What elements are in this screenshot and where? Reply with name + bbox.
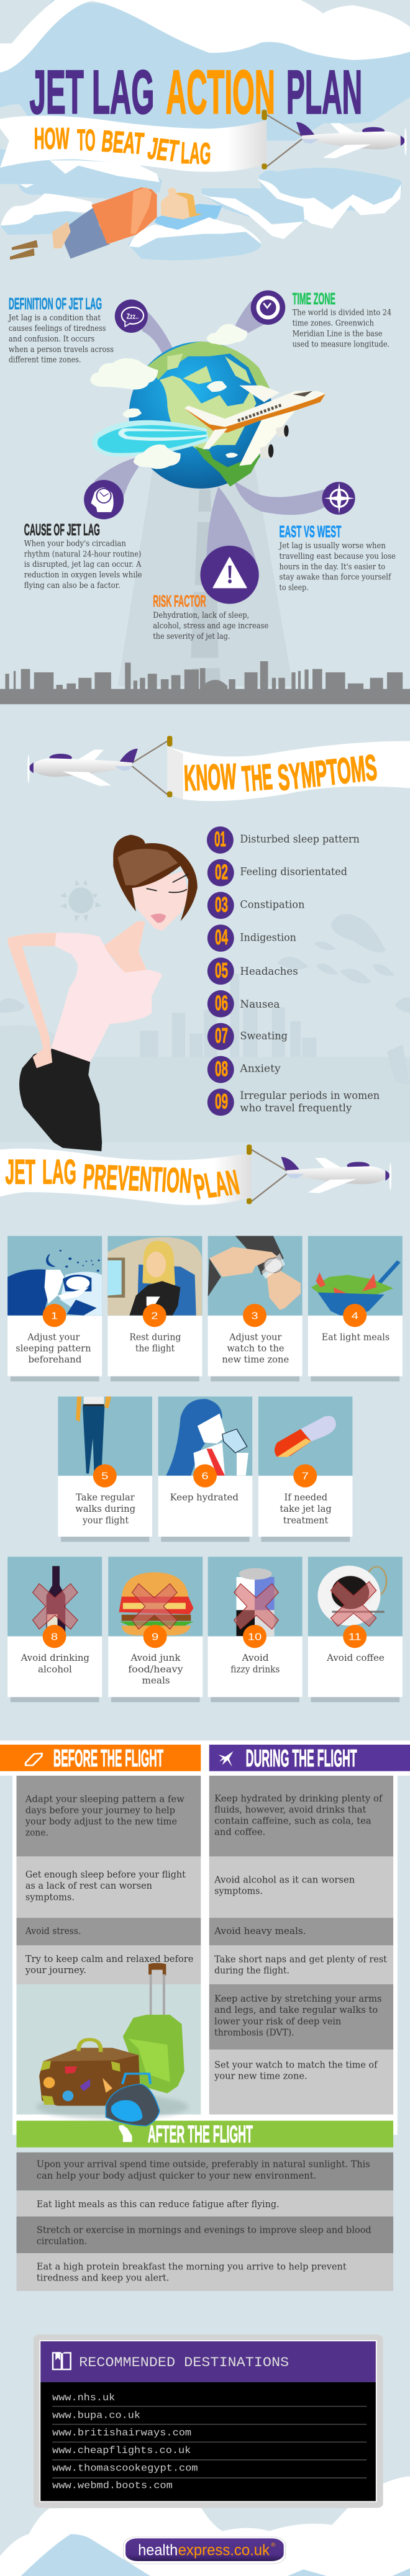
symptom list: 02: [215, 860, 228, 884]
plane towing prevention banner: [247, 1144, 391, 1204]
card 2: [107, 1236, 202, 1381]
card 6: [158, 1396, 252, 1542]
icon: clock: [251, 291, 285, 325]
icon: compass: [322, 482, 355, 515]
card 4: 4: [352, 1310, 358, 1321]
light beams: [117, 468, 293, 686]
illustration: wine bottle: [33, 1566, 78, 1636]
illustration: walking man: [76, 1396, 111, 1473]
text: time zone: The world is divided into 24: [293, 308, 391, 318]
card 8: Avoid drinking: [20, 1653, 89, 1663]
card 7: treatment: [283, 1515, 328, 1526]
card 1: Adjust your: [27, 1332, 80, 1343]
during column: your new time zone.: [214, 2071, 308, 2082]
card 10: Avoid: [241, 1653, 269, 1663]
icon: speech bubble: Zzz..: [127, 313, 139, 321]
card 10: [208, 1557, 303, 1702]
badge 8: [43, 1625, 66, 1648]
after rows: can help your body adjust quicker to your new environment.: [37, 2171, 316, 2181]
card 1: sleeping pattern: [16, 1343, 91, 1354]
section: before and during the flight: BEFORE THE FLIGHT: [53, 1745, 163, 1772]
section: symptoms: [0, 736, 410, 1151]
symptom list: 09: [215, 1090, 228, 1113]
globe: [129, 341, 273, 489]
card 11: [308, 1557, 403, 1702]
symptom list: 08: [215, 1057, 228, 1080]
text: east vs west: travelling east because you lose: [280, 552, 396, 561]
url list: www.cheapflights.co.uk: [52, 2446, 191, 2456]
card 4: Eat light meals: [322, 1332, 390, 1343]
header: before the flight: [0, 1745, 201, 1772]
symptom list: Headaches: [240, 965, 298, 977]
card 9: food/heavy: [128, 1664, 183, 1675]
logo badge: health: [138, 2541, 178, 2559]
card 1: beforehand: [28, 1354, 81, 1365]
card 3: 3: [251, 1310, 258, 1321]
woman: [8, 834, 198, 1151]
badge 3: [243, 1304, 266, 1327]
section: prevention plan: [0, 1144, 403, 1542]
section: what is jet lag: [0, 290, 410, 704]
during column: during the flight.: [214, 1965, 289, 1976]
url list: [52, 2393, 198, 2492]
text: risk factor: [153, 592, 269, 641]
card 2: 2: [151, 1310, 158, 1321]
text: east vs west: hours in the day. It's easier to: [280, 562, 385, 572]
text: risk factor: alcohol, stress and age increase: [153, 621, 269, 631]
sleeping man: [10, 188, 222, 260]
card 7: 7: [302, 1471, 309, 1481]
header: after the flight: [17, 2121, 393, 2148]
badge 6: [193, 1464, 217, 1488]
card 1: [7, 1236, 102, 1381]
symptom list: Anxiety: [239, 1062, 281, 1075]
card 5: walks during: [75, 1504, 135, 1514]
plane towing symptoms banner: [27, 736, 172, 797]
symptom list: Disturbed sleep pattern: [240, 833, 360, 845]
before column: Get enough sleep before your flight: [25, 1869, 186, 1880]
text: time zone: TIME ZONE: [293, 290, 335, 308]
card 9: 9: [152, 1631, 158, 1642]
card 11: Avoid coffee: [326, 1653, 385, 1663]
after rows: tiredness and keep you alert.: [37, 2272, 169, 2284]
before column: Adapt your sleeping pattern a few: [25, 1794, 184, 1805]
badge 4: [343, 1304, 367, 1327]
card 6: Keep hydrated: [170, 1492, 239, 1503]
text: time zone: used to measure longitude.: [293, 340, 390, 349]
lower left clouds: [0, 149, 162, 199]
badge 1: [43, 1304, 66, 1327]
blue cloud peaks: [21, 2534, 410, 2576]
badge 2: [143, 1304, 166, 1327]
section: prevention plan: PLAN: [191, 1164, 242, 1206]
during column: and coffee.: [214, 1827, 265, 1838]
before column: [17, 1776, 201, 2115]
logo badge: ®: [271, 2542, 276, 2547]
logo badge: [124, 2537, 286, 2564]
text: east vs west: Jet lag is usually worse when: [278, 541, 386, 551]
white panel: [0, 1740, 410, 2135]
text: definition: and confusion. It occurs: [9, 335, 94, 344]
card 9: meals: [142, 1675, 170, 1686]
runway marks: [191, 489, 221, 689]
clouds: [90, 324, 247, 469]
banner: prevention: [0, 1149, 252, 1206]
faint sun: [60, 880, 102, 922]
section: before and during the flight: [0, 1740, 410, 2135]
before column: as a lack of rest can worsen: [25, 1881, 152, 1891]
symptom list: 07: [215, 1024, 228, 1047]
text: definition: different time zones.: [9, 355, 81, 365]
banner: how to beat jet lag: LAG: [180, 136, 212, 171]
during column: symptoms.: [214, 1886, 263, 1897]
symptom list: 04: [215, 925, 228, 949]
faint city background: [0, 914, 410, 1142]
card 3: watch to the: [227, 1343, 285, 1354]
text: cause: rhythm (natural 24-hour routine): [24, 549, 141, 559]
before column: zone.: [25, 1827, 48, 1838]
card 2: Rest during: [129, 1332, 181, 1343]
text: risk factor: RISK FACTOR: [153, 592, 206, 610]
bottom clouds: [0, 2476, 410, 2576]
url list: www.bupa.co.uk: [52, 2410, 140, 2421]
icon: speech bubble: [115, 299, 148, 333]
destinations panel: [34, 2334, 383, 2508]
card 3: new time zone: [222, 1354, 289, 1365]
card 8: alcohol: [38, 1664, 72, 1675]
text: time zone: Meridian Line is the base: [293, 329, 383, 338]
connector cones: [94, 301, 324, 561]
card 9: [108, 1557, 203, 1702]
card 11: 11: [348, 1631, 362, 1642]
card 6: 6: [201, 1471, 209, 1481]
card 2: the flight: [135, 1343, 175, 1354]
card 8: [7, 1557, 102, 1702]
text: time zone: time zones. Greenwich: [293, 319, 374, 328]
logo badge: express.co.uk: [178, 2541, 270, 2559]
after rows: circulation.: [37, 2236, 87, 2247]
right clouds: [201, 168, 402, 224]
illustration: drinks can: [234, 1568, 278, 1636]
banner: how to beat jet lag: [0, 115, 266, 172]
symptom list: who travel frequently: [240, 1102, 352, 1114]
text: risk factor: the severity of jet lag.: [153, 632, 230, 641]
card 5: your flight: [82, 1515, 129, 1526]
symptom list: Irregular periods in women: [240, 1089, 380, 1101]
text: time zone: [293, 290, 391, 349]
illustration: woman drinking water: [166, 1399, 248, 1476]
symptom list: 06: [215, 991, 228, 1015]
section: header sky: [0, 0, 410, 260]
text: east vs west: [278, 523, 396, 593]
symptom list: Feeling disorientated: [240, 865, 347, 878]
symptom list: [207, 826, 380, 1116]
symptom list: Indigestion: [240, 931, 296, 944]
text: east vs west: EAST VS WEST: [280, 523, 342, 541]
card 8: 8: [51, 1631, 58, 1642]
section: recommended destinations: [0, 2334, 410, 2576]
illustration: coffee cup: [317, 1566, 386, 1626]
illustration: woman in plane seat: [107, 1237, 202, 1316]
illustration: capsule: [275, 1416, 336, 1457]
banner: know the symptoms: KNOW: [183, 756, 237, 798]
symptom list: Nausea: [240, 998, 280, 1010]
symptom list: Sweating: [240, 1029, 288, 1042]
banner: prevention: PREVENTION: [82, 1158, 193, 1200]
card 10: 10: [248, 1631, 262, 1642]
text: cause: [24, 521, 142, 590]
before column: your body adjust to the new time: [25, 1816, 177, 1827]
symptom list: 05: [215, 959, 228, 982]
card 9: Avoid junk: [130, 1653, 181, 1663]
city skyline: [0, 661, 410, 704]
during column: Avoid alcohol as it can worsen: [214, 1874, 355, 1886]
card 5: [58, 1396, 152, 1542]
illustration: sleeping person: [7, 1250, 102, 1316]
airliner: [184, 386, 326, 466]
text: cause: flying can also be a factor.: [24, 581, 121, 590]
text: risk factor: Dehydration, lack of sleep,: [153, 611, 249, 620]
title: JET LAG: [30, 58, 154, 126]
section: things to avoid: [7, 1557, 403, 1702]
icon: plane: [218, 1751, 233, 1767]
banner: know the symptoms: [167, 741, 410, 801]
sky cloud light blue: [0, 0, 410, 141]
illustration: wristwatch: [208, 1236, 301, 1310]
banner: how to beat jet lag: BEAT: [100, 124, 145, 160]
card 5: 5: [101, 1471, 108, 1481]
illustration: salad: [311, 1262, 399, 1316]
bottom cloud: [128, 217, 262, 260]
banner: prevention: JET: [5, 1153, 35, 1191]
text: cause: CAUSE OF JET LAG: [24, 521, 100, 539]
url list: www.webmd.boots.com: [52, 2480, 173, 2492]
before column: days before your journey to help: [25, 1805, 175, 1816]
banner: how to beat jet lag: JET: [145, 131, 181, 168]
symptom list: 03: [215, 893, 228, 916]
text: cause: When your body's circadian: [24, 539, 126, 548]
symptom list: Constipation: [240, 898, 305, 910]
before column: Try to keep calm and relaxed before: [25, 1954, 193, 1964]
icon: escalator: [25, 1753, 42, 1765]
after rows: Eat light meals as this can reduce fatigue after flying.: [37, 2199, 280, 2210]
panel heading: RECOMMENDED DESTINATIONS: [79, 2355, 289, 2370]
foreground cloud over man: [129, 217, 239, 247]
banner: know the symptoms: THE: [240, 756, 274, 799]
orbit trail: [93, 420, 209, 456]
icon: warning: [200, 546, 259, 604]
text: east vs west: to sleep.: [280, 583, 309, 593]
icon: traveller: [119, 2125, 132, 2142]
card 7: take jet lag: [280, 1504, 332, 1514]
symptom list: 01: [214, 827, 226, 851]
during column: fluids, however, avoid drinks that: [214, 1804, 366, 1815]
during column: [209, 1776, 393, 2115]
illustration: burger: [119, 1572, 193, 1635]
text: definition: DEFINITION OF JET LAG: [9, 295, 102, 313]
card 3: [208, 1236, 303, 1381]
plane towing banner: [262, 110, 407, 169]
during column: lower your risk of deep vein: [214, 2016, 341, 2027]
text: cause: is disrupted, jet lag can occur. A: [24, 560, 142, 569]
icon: head with clock: [84, 480, 124, 519]
text: definition: causes feelings of tiredness: [9, 324, 106, 333]
url list: www.nhs.uk: [52, 2393, 115, 2403]
url list: www.thomascookegypt.com: [52, 2463, 198, 2474]
during column: Avoid heavy meals.: [214, 1926, 306, 1937]
text: east vs west: stay awake than force yourself: [280, 572, 391, 582]
card 4: [308, 1236, 403, 1381]
card 7: If needed: [285, 1492, 327, 1503]
card 10: fizzy drinks: [230, 1664, 280, 1675]
before column: Avoid stress.: [25, 1926, 81, 1937]
card 1: 1: [51, 1310, 58, 1321]
text: definition: when a person travels across: [9, 345, 114, 355]
section: after the flight: [17, 1963, 393, 2291]
text: cause: reduction in oxygen levels while: [24, 571, 142, 580]
badge 10: [243, 1625, 266, 1648]
during column: thrombosis (DVT).: [214, 2027, 294, 2038]
banner: how to beat jet lag: TO: [77, 123, 96, 157]
text: definition: [7, 295, 114, 365]
before column: symptoms.: [25, 1892, 75, 1903]
card 7: [258, 1396, 352, 1542]
badge 11: [343, 1625, 367, 1648]
banner: how to beat jet lag: HOW: [34, 121, 70, 155]
badge 5: [93, 1464, 117, 1488]
luggage illustration: [37, 1963, 188, 2126]
card 5: Take regular: [76, 1492, 135, 1503]
card 3: Adjust your: [229, 1332, 282, 1343]
banner: prevention: LAG: [42, 1153, 76, 1191]
badge 7: [293, 1464, 317, 1488]
after rows: [17, 2153, 393, 2291]
before column: your journey.: [25, 1965, 86, 1976]
text: definition: Jet lag is a condition that: [7, 314, 101, 323]
badge 9: [144, 1625, 167, 1648]
sky cloud white: [0, 0, 410, 73]
icon: book: [52, 2352, 71, 2370]
url list: www.britishairways.com: [52, 2428, 191, 2439]
